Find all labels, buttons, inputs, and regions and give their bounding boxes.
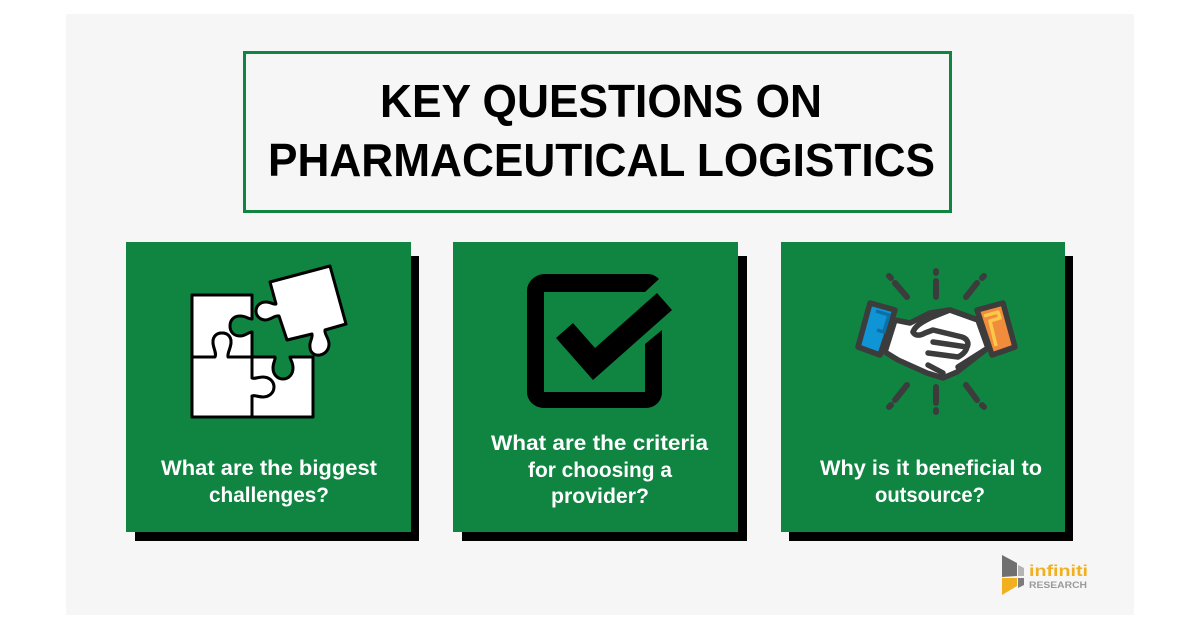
title: KEY QUESTIONS ON [380,75,822,127]
text: card three question: outsource? [875,484,985,507]
text: card one question: What are the biggest [161,457,377,480]
text: card one question: challenges? [209,484,329,507]
logo: Infiniti Research [1002,555,1088,595]
title: PHARMACEUTICAL LOGISTICS [268,134,935,186]
panel: provider criteria [453,242,747,541]
text: card two question: What are the criteria [491,432,708,455]
panel: outsourcing benefit [781,242,1073,541]
text: card three question: Why is it beneficial to [820,457,1042,480]
text: card one question [161,457,377,507]
icon: check box [527,274,672,408]
icon: handshake [858,271,1015,412]
title [244,52,950,212]
icon: puzzle pieces [192,266,346,417]
text: card two question: for choosing a [528,459,672,482]
panel: biggest challenges [126,242,419,541]
logo: Infiniti Research: RESEARCH [1029,580,1087,591]
text: card three question [820,457,1042,507]
text: card two question [491,432,708,508]
text: card two question: provider? [551,485,649,508]
logo: Infiniti Research: infiniti [1029,563,1088,580]
